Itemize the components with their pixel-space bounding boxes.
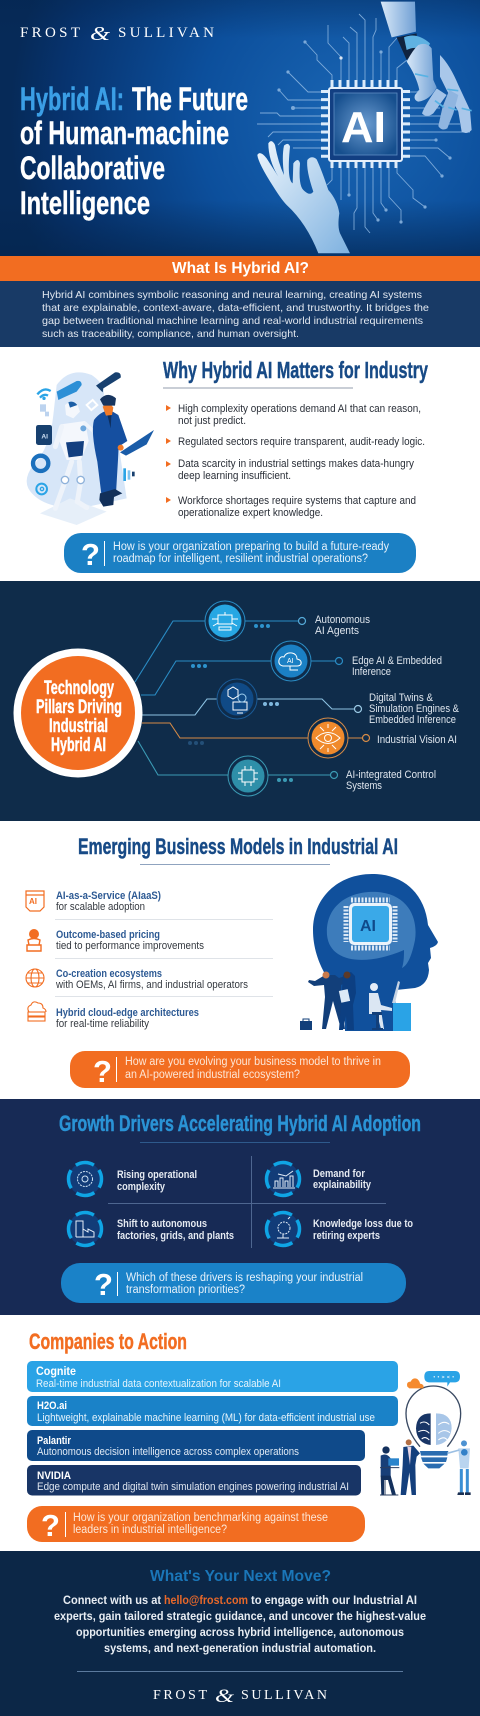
text block: definition: such as traceability, compliance, and human oversight. [42,328,299,340]
text block: definition: gap between traditional machine learning and real-world industrial requirements [42,315,423,327]
card: NVIDIA: Edge compute and digital twin simulation engines powering industrial AI [37,1481,349,1493]
list: reasons: High complexity operations demand AI that can reason, [178,403,421,415]
labels: pillars: Simulation Engines & [369,703,460,715]
text block: definition: Hybrid AI combines symbolic reasoning and neural learning, creating AI systems [42,289,422,301]
callout: roadmap question [64,533,416,573]
callout: business model question [70,1051,410,1089]
callout: drivers question: Which of these drivers is reshaping your industrial [126,1272,363,1284]
robot [447,1440,471,1495]
title: Collaborative [20,150,165,186]
icon: operational complexity [68,1162,102,1196]
logo: Frost & Sullivan footer: & [215,1686,234,1707]
center circle: Technology Pillars title: Hybrid AI [51,735,106,756]
card: Cognite [27,1361,398,1392]
heading: What's Your Next Move: What's Your Next Move? [150,1568,331,1585]
callout: roadmap question: How is your organization preparing to build a future-ready [113,541,389,553]
illustration: lightbulb with brain, people and robot [380,1371,471,1495]
labels: pillars: AI-integrated Control [346,769,436,781]
list: business models: AI-as-a-Service (AIaaS) [56,890,161,902]
callout: business model question: How are you evolving your business model to thrive in [125,1056,381,1068]
labels: pillars: Embedded Inference [369,714,456,726]
list: business models: Hybrid cloud-edge architectures [56,1007,199,1019]
list: business models: Outcome-based pricing [56,929,160,941]
panel: Why Hybrid AI Matters [0,348,480,581]
card: Cognite: Real-time industrial data contextualization for scalable AI [36,1378,281,1390]
panel: Technology Pillars [0,581,480,821]
icon: digital twins [217,679,257,719]
list: reasons: not just predict. [178,415,246,427]
labels: pillars: Digital Twins & [369,692,434,704]
text block: contact: experts, gain tailored strategic guidance, and uncover the highest-value [54,1609,426,1623]
card: Palantir: Autonomous decision intelligence across complex operations [37,1446,299,1458]
text: growth drivers: Rising operational [117,1169,197,1181]
icon: AI chip [324,84,406,164]
icon: cloud edge [28,1002,46,1021]
callout: drivers question: ? [94,1267,113,1302]
logo: Frost & Sullivan: & [90,23,111,45]
list: reasons: Data scarcity in industrial settings makes data-hungry [178,458,414,470]
text: growth drivers: complexity [117,1181,166,1193]
labels: pillars: Industrial Vision AI [377,734,457,746]
text: growth drivers: Knowledge loss due to [313,1218,413,1230]
woman at desk [380,1446,399,1495]
circuit traces [257,14,470,233]
icon: control systems [228,756,268,796]
title [20,81,248,221]
list: business models [55,890,273,1030]
text block: contact: hello@frost.com [164,1593,248,1607]
illustration: lightbulb with brain, people and robot: ••><• [433,1374,454,1380]
card: H2O.ai: H2O.ai [37,1400,67,1412]
card: Palantir [27,1430,365,1461]
callout: benchmarking question: leaders in industrial intelligence? [73,1524,227,1536]
list: business models: with OEMs, AI firms, and industrial operators [55,979,248,991]
callout: drivers question [61,1263,406,1303]
labels: pillars [315,614,460,792]
callout: benchmarking question: How is your organization benchmarking against these [73,1512,328,1524]
text: growth drivers: factories, grids, and plants [117,1230,234,1242]
icon: knowledge loss [266,1212,300,1246]
illustration: AI head with team [300,874,438,1031]
icon: outcome pricing [27,929,41,951]
list: business models: tied to performance improvements [56,940,204,952]
icon: head chip: AI [360,918,376,935]
illustration: robot and engineer [27,372,154,525]
card: Palantir: Palantir [37,1435,72,1447]
text: growth drivers: Shift to autonomous [117,1218,207,1230]
standing man [401,1439,420,1495]
center circle: Technology Pillars title: Industrial [49,716,108,737]
title: Intelligence [20,185,150,221]
card: NVIDIA [27,1465,361,1496]
text block: contact: Connect with us at [63,1593,161,1607]
icon: head chip [346,900,395,948]
icon: human hand [257,141,350,253]
list: reasons: deep learning insufficient. [178,470,291,482]
callout: business model question: ? [93,1054,112,1089]
icon: AI as a service: AI [29,897,37,906]
center circle: Technology Pillars title: Pillars Driving [36,697,122,718]
callout: roadmap question: ? [81,537,100,572]
icon: co-creation globe [26,969,44,987]
text: growth drivers [117,1168,413,1242]
heading: What Is Hybrid AI: What Is Hybrid AI? [172,260,309,277]
logo: Frost & Sullivan: FROST [20,25,80,41]
logo: Frost & Sullivan footer: FROST [153,1688,207,1703]
icon: autonomous factories [68,1212,102,1246]
callout: roadmap question: roadmap for intelligent, resilient industrial operations? [113,553,368,565]
icon: robot hand [381,2,472,133]
logo: Frost & Sullivan footer: SULLIVAN [241,1688,327,1703]
people and robot [300,972,411,1031]
list: business models: for real-time reliability [56,1018,149,1030]
card: Cognite: Cognite [36,1364,76,1378]
text block: definition [42,289,429,340]
callout: benchmarking question [27,1506,365,1543]
panel: Companies to Action [0,1316,480,1550]
panel: What Is Hybrid AI [0,256,480,347]
title: of Human-machine [20,115,229,151]
callout: drivers question: transformation priorities? [126,1284,245,1296]
text block: contact: opportunities emerging across hybrid intelligence, autonomous [76,1625,404,1639]
list: reasons: Workforce shortages require systems that capture and [178,495,416,507]
icon: explainability [266,1162,300,1196]
text: growth drivers: Demand for [313,1168,366,1180]
list: reasons [166,403,425,519]
callout: business model question: an AI-powered industrial ecosystem? [125,1069,300,1081]
text block: definition: that are explainable, context-aware, data-efficient, and trustworthy. It bridges the [42,302,429,314]
list: reasons: Regulated sectors require transparent, audit-ready logic. [178,436,425,448]
heading: Companies to Action: Companies to Action [29,1329,187,1354]
text block: contact: systems, and next-generation industrial automation. [104,1641,376,1655]
panel: Growth Drivers [0,1099,480,1315]
text block: contact [54,1593,426,1655]
icon: edge AI cloud [271,641,311,681]
labels: pillars: Edge AI & Embedded [352,655,442,667]
card: H2O.ai [27,1396,398,1426]
card: H2O.ai: Lightweight, explainable machine learning (ML) for data-efficient industrial use [37,1412,375,1424]
title: Hybrid AI: [20,81,124,117]
list: business models: for scalable adoption [56,901,145,913]
panel: Emerging Business Models [0,821,480,1099]
engineer figure [93,395,154,507]
list: business models: Co-creation ecosystems [56,968,162,980]
robot figure [55,402,118,508]
text block: contact: to engage with our Industrial AI [251,1593,417,1607]
labels: pillars: Inference [352,666,391,678]
text: growth drivers: retiring experts [313,1230,380,1242]
logo: Frost & Sullivan [20,23,214,45]
title: The Future [132,81,248,117]
labels: pillars: Systems [346,780,382,792]
icon: edge AI cloud: AI [287,658,294,665]
center circle: Technology Pillars title [14,648,142,778]
labels: pillars: Autonomous [315,614,370,626]
icon: autonomous agents [205,601,245,641]
list: reasons: operationalize expert knowledge. [178,507,323,519]
center circle: Technology Pillars title: Technology [44,678,114,699]
illustration: robot and engineer: AI [41,433,48,440]
labels: pillars: AI Agents [315,625,359,637]
logo: Frost & Sullivan: SULLIVAN [118,25,214,41]
connector lines [135,621,366,775]
callout: benchmarking question: ? [41,1508,60,1543]
card: NVIDIA: NVIDIA [37,1470,71,1482]
icon: AI as a service [26,891,44,911]
panel: What's Your Next Move [0,1551,480,1716]
icon: vision AI eye [308,718,348,758]
logo: Frost & Sullivan footer [153,1686,327,1707]
text: growth drivers: explainability [313,1179,372,1191]
panel: hero banner [0,0,480,256]
icon: AI chip: AI [341,103,386,152]
